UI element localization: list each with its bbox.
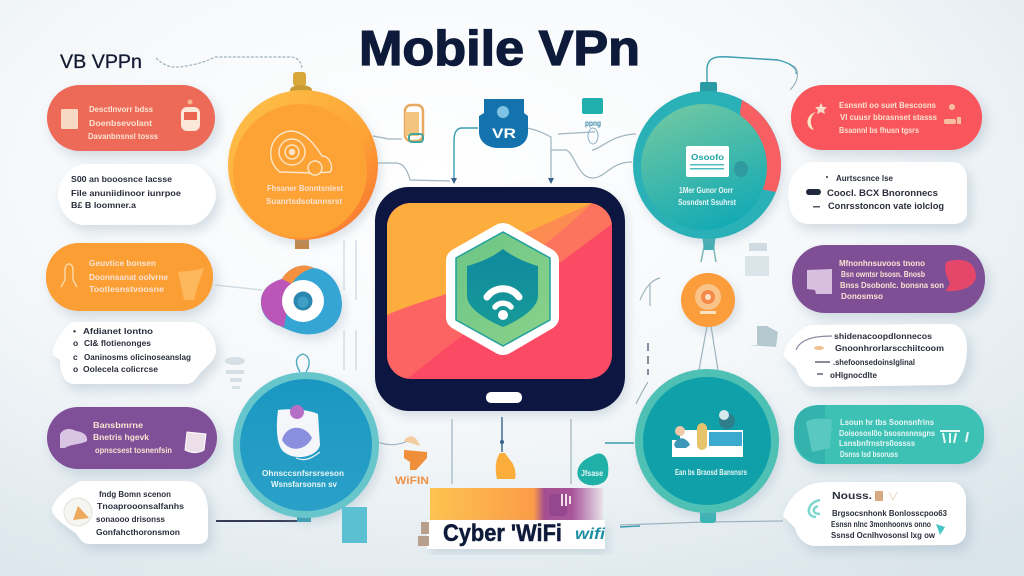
text: purple pill: Bansbmrne	[93, 420, 143, 430]
text: teal pill: Dsnss lsd bsoruss	[840, 449, 898, 459]
icon: coral document	[61, 109, 78, 129]
text: white pill 2 right: .shefoonsedoinslglinal	[833, 357, 915, 367]
text: purple pill right: Bsn owntsr bsosn. Bnosb	[841, 269, 925, 279]
icon: shield with wifi	[446, 223, 559, 355]
panel: right teal pill	[794, 405, 984, 464]
title: Mobile VPn	[359, 22, 640, 76]
text: teal pill: Doisososl0o bsosnsnnsgns	[839, 428, 935, 438]
icon: teal wifi bubble	[577, 453, 608, 485]
icon: teal card	[342, 507, 367, 543]
text: white pill 1 right	[827, 173, 944, 212]
text: teal circle: 1Mer Gunor Oorr	[679, 185, 734, 195]
icon: white mini graphic	[940, 431, 968, 443]
text: orange circle: Suanrtsdsotannsrst	[266, 196, 342, 206]
connector wires	[215, 57, 797, 527]
icon: pale panel and box	[794, 405, 832, 464]
icon: card	[686, 146, 748, 177]
teal circle module	[633, 82, 781, 250]
icon: clip top	[405, 105, 423, 142]
text: purple pill right: Mfnonhnsuvoos tnono	[839, 258, 925, 268]
text: white pill 2: Oolecela colicrcse	[83, 364, 158, 374]
text: red pill: Vl cuusr bbrasnset stasss	[840, 112, 937, 122]
text: white pill 2 right	[830, 331, 944, 380]
text: white pill 3: Gonfahcthoronsmon	[96, 527, 180, 537]
icon: bell badge	[64, 498, 92, 526]
text: teal pill	[839, 417, 935, 459]
icon: red heart	[945, 260, 976, 291]
text: white pill 2: CI& flotienonges	[84, 338, 151, 348]
text: white pill 3 right	[831, 491, 947, 540]
icon: moon and star	[807, 103, 827, 130]
icon: wifi router orange: WiFIN	[395, 475, 429, 487]
panel: left white pill 2	[53, 322, 216, 384]
icon: teal tag with label: ppng	[585, 118, 601, 128]
subtitle tag with connector: VB VPPn	[60, 52, 142, 73]
text: white pill 3: Tnoaprooonsalfanhs	[97, 501, 184, 511]
icon: VPN badge	[479, 99, 528, 148]
text: white pill 1: B£ B loomner.a	[71, 200, 136, 210]
tablet screen	[387, 203, 612, 379]
text: orange pill: Doonnsanat oolvrne	[89, 272, 168, 282]
icon: orange badge target	[695, 284, 721, 314]
text: white pill 3 right: Brgsocsnhonk Bonlosscpoo63	[832, 508, 947, 518]
text: orange circle: Fhsaner Bonntsnlest	[267, 183, 343, 193]
text: orange pill: Tootlesnstvoosne	[89, 284, 164, 294]
text: white pill 3: sonaooo drisonss	[96, 514, 165, 524]
icon: clasp	[290, 72, 312, 95]
icon: stamp	[807, 269, 832, 294]
text: white pill 2	[73, 326, 191, 374]
text: white pill 2: Afdianet lontno	[83, 326, 153, 336]
icon: purple mug	[185, 432, 206, 453]
text: teal circle: Sosndsnt Ssuhrst	[678, 197, 736, 207]
text: purple pill: opnscsest tosnenfsin	[95, 445, 172, 455]
small orange circle	[681, 273, 735, 327]
tablet home button	[486, 392, 522, 403]
faint figure: left middle	[225, 357, 245, 389]
panel: left white pill 3	[52, 481, 208, 544]
text: white pill 3 right: Ssnsd Ocnlhvosonsl lxg ow	[831, 530, 935, 540]
icon: swirl cloud	[271, 131, 332, 175]
icon: teal swirl	[809, 500, 820, 517]
text: bottom right circle: Ean bs Braosd Bansnsrs	[675, 467, 747, 477]
text: purple pill right: Donosmso	[841, 291, 883, 301]
text: white pill 2 right: oHlgnocdlte	[830, 370, 877, 380]
text: orange pill: Geuvtice bonsen	[89, 258, 156, 268]
text: red pill	[839, 100, 937, 135]
text: white pill 1	[71, 174, 181, 210]
panel: left orange pill	[46, 243, 213, 311]
text: purple pill: Bnetris hgevk	[93, 432, 149, 442]
panel: right red pill	[791, 85, 982, 150]
faint devices right	[745, 243, 778, 347]
text: white pill 3 right: Esnsn nlnc 3monhoonvs onno	[831, 519, 931, 529]
text: white pill 1 right: Coocl. BCX Bnoronnecs	[827, 188, 938, 199]
panel: right white pill 2	[783, 324, 967, 387]
text: blue circle: Wsnsfarsonsn sv	[271, 479, 337, 489]
text: white pill 2: •	[73, 326, 76, 336]
text: white pill 2: o	[73, 338, 78, 348]
text: red pill: Bsaonnl bs fhusn tgsrs	[839, 125, 919, 135]
icon: dark marks	[806, 176, 828, 208]
text: purple pill	[93, 420, 172, 455]
text: blue circle	[262, 468, 344, 489]
text: coral pill	[88, 104, 158, 141]
icon: orange lock	[496, 453, 515, 479]
icon: purple cloud	[60, 429, 87, 448]
text: purple pill right	[839, 258, 944, 301]
text: white pill 2 right: shidenacoopdlonnecos	[834, 331, 932, 341]
text: teal circle	[678, 185, 736, 207]
icon: orange cup	[178, 268, 204, 300]
icon: tan figures	[875, 491, 897, 501]
icon: VPN badge: VR	[492, 125, 516, 141]
icon: coral jar	[181, 100, 200, 131]
text: coral pill: Doenbsevolant	[89, 118, 152, 128]
icon: top clasp	[700, 82, 717, 96]
text: coral pill: Desctlnvorr bdss	[89, 104, 153, 114]
text: white pill 2: o	[73, 364, 78, 374]
icon: person outline	[61, 264, 77, 287]
text: white pill 3: fndg Bomn scenon	[99, 489, 171, 499]
text: white pill 1: S00 an booosnce lacsse	[71, 174, 172, 184]
text: purple pill right: Bnss Dsobonlc. bonsna son	[840, 280, 944, 290]
icon: teal tag with label	[582, 98, 603, 144]
text: teal pill: Lsnsbnfrnstrs0ossss	[839, 438, 915, 448]
panel: right purple pill	[792, 245, 985, 313]
panel: left purple pill	[47, 407, 217, 469]
text: orange circle	[266, 183, 343, 206]
text: white pill 2: c	[73, 352, 78, 362]
text: white pill 2 right: Gnoonhrorlarscchiitcoom	[835, 343, 944, 353]
text: white pill 3 right: Nouss.	[832, 491, 872, 502]
text: white pill 1: File anuniidinoor iunrpoe	[71, 188, 181, 198]
icon: small statue	[418, 522, 429, 546]
subtitle tag with connector	[60, 52, 302, 73]
text: orange pill	[89, 258, 168, 294]
panel: right white pill 3	[783, 482, 966, 546]
icon: curved marks	[796, 336, 832, 374]
panel: left coral pill	[47, 85, 215, 151]
icon: figure at desk	[944, 104, 961, 124]
text: white pill 3	[96, 489, 184, 537]
bottom right circle module	[635, 369, 779, 523]
text: coral pill: Davanbnsnsl tosss	[88, 131, 158, 141]
text: teal pill: Lsoun hr tbs Soonsnfrins	[840, 417, 934, 427]
text: blue circle: Ohnsccsnfsrsrseson	[262, 468, 344, 478]
tablet	[375, 187, 625, 411]
banner: Cyber WiFi: Cyber 'WiFi	[443, 520, 562, 547]
icon: desk scene	[672, 410, 743, 457]
banner: Cyber WiFi: wifi	[575, 526, 606, 543]
text: white pill 1 right: Conrsstoncon vate iolclog	[828, 201, 944, 212]
orange circle module	[228, 72, 378, 249]
text: white pill 1 right: Aurtscsnce lse	[836, 173, 893, 183]
text: white pill 2: Oaninosms olicinoseanslag	[84, 352, 191, 362]
text: red pill: Esnsntl oo suet Bescosns	[839, 100, 936, 110]
icon: card: Osoofo	[691, 152, 724, 162]
panel: right white pill 1	[788, 162, 967, 224]
icon: wifi router orange	[395, 436, 429, 487]
panel: left white pill 1	[58, 164, 216, 225]
icon: colorful camera blob	[261, 266, 342, 334]
banner: Cyber WiFi	[418, 488, 606, 549]
blue circle module	[233, 354, 379, 522]
icon: teal wifi bubble: Jfsase	[581, 468, 603, 478]
icon: person with bag	[277, 405, 320, 460]
